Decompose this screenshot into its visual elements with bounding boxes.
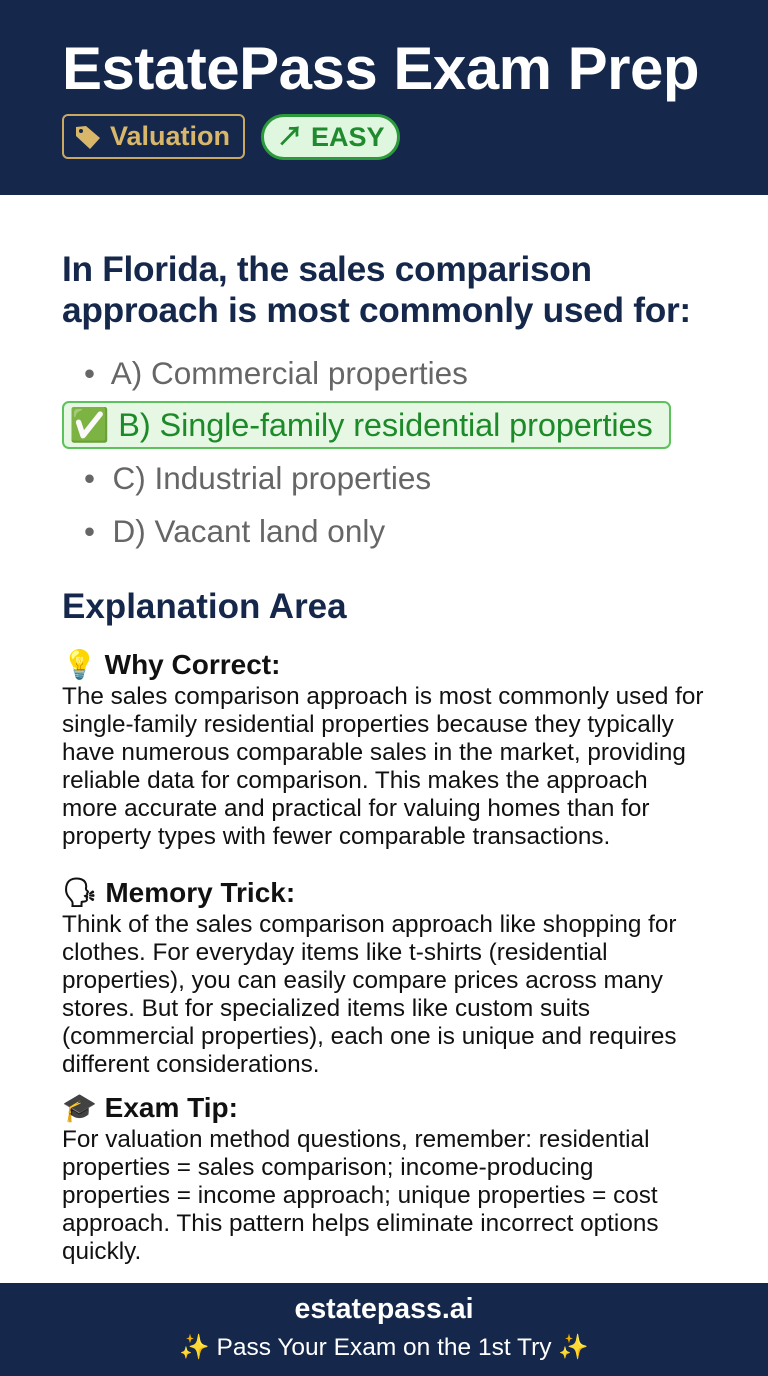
why correct text: more accurate and practical for valuing homes than for <box>62 795 649 822</box>
option B correct: ✅ B) Single-family residential properties <box>69 407 653 443</box>
exam tip text: properties = sales comparison; income-producing <box>62 1154 593 1181</box>
difficulty badge: ↗ EASY <box>276 122 385 152</box>
explanation heading: Explanation Area <box>62 587 347 626</box>
exam tip heading: 🎓 Exam Tip: <box>62 1092 238 1123</box>
memory trick text: clothes. For everyday items like t-shirts (residential <box>62 939 608 966</box>
question <box>62 250 691 330</box>
memory trick text: properties), you can easily compare prices across many <box>62 967 663 994</box>
memory trick heading: 🗣 Memory Trick: <box>62 877 295 908</box>
why correct text <box>62 683 704 850</box>
memory trick text: stores. But for specialized items like custom suits <box>62 995 590 1022</box>
exam tip text: approach. This pattern helps eliminate incorrect options <box>62 1210 659 1237</box>
category tag: valuation: Valuation <box>110 121 230 151</box>
footer <box>0 1283 768 1376</box>
memory trick text: Think of the sales comparison approach like shopping for <box>62 911 677 938</box>
footer site: estatepass.ai <box>294 1293 474 1325</box>
exam tip text: properties = income approach; unique properties = cost <box>62 1182 658 1209</box>
question: approach is most commonly used for: <box>62 291 691 330</box>
category tag: valuation <box>62 114 245 159</box>
exam tip text: quickly. <box>62 1238 141 1265</box>
header <box>0 0 768 195</box>
option C: • C) Industrial properties <box>84 460 431 496</box>
exam tip text: For valuation method questions, remember: residential <box>62 1126 649 1153</box>
option D: • D) Vacant land only <box>84 513 385 549</box>
option A: • A) Commercial properties <box>84 355 468 391</box>
difficulty badge <box>261 114 400 160</box>
why correct text: single-family residential properties because they typically <box>62 711 674 738</box>
why correct text: reliable data for comparison. This makes the approach <box>62 767 648 794</box>
footer tagline: ✨ Pass Your Exam on the 1st Try ✨ <box>179 1334 589 1361</box>
title: EstatePass Exam Prep <box>62 35 699 102</box>
why correct heading: 💡 Why Correct: <box>62 649 280 680</box>
memory trick text: (commercial properties), each one is unique and requires <box>62 1023 676 1050</box>
question: In Florida, the sales comparison <box>62 250 592 289</box>
why correct text: have numerous comparable sales in the market, providing <box>62 739 686 766</box>
memory trick text <box>62 911 677 1078</box>
memory trick text: different considerations. <box>62 1051 320 1078</box>
exam tip text <box>62 1126 659 1265</box>
why correct text: The sales comparison approach is most commonly used for <box>62 683 703 710</box>
why correct text: property types with fewer comparable transactions. <box>62 823 610 850</box>
